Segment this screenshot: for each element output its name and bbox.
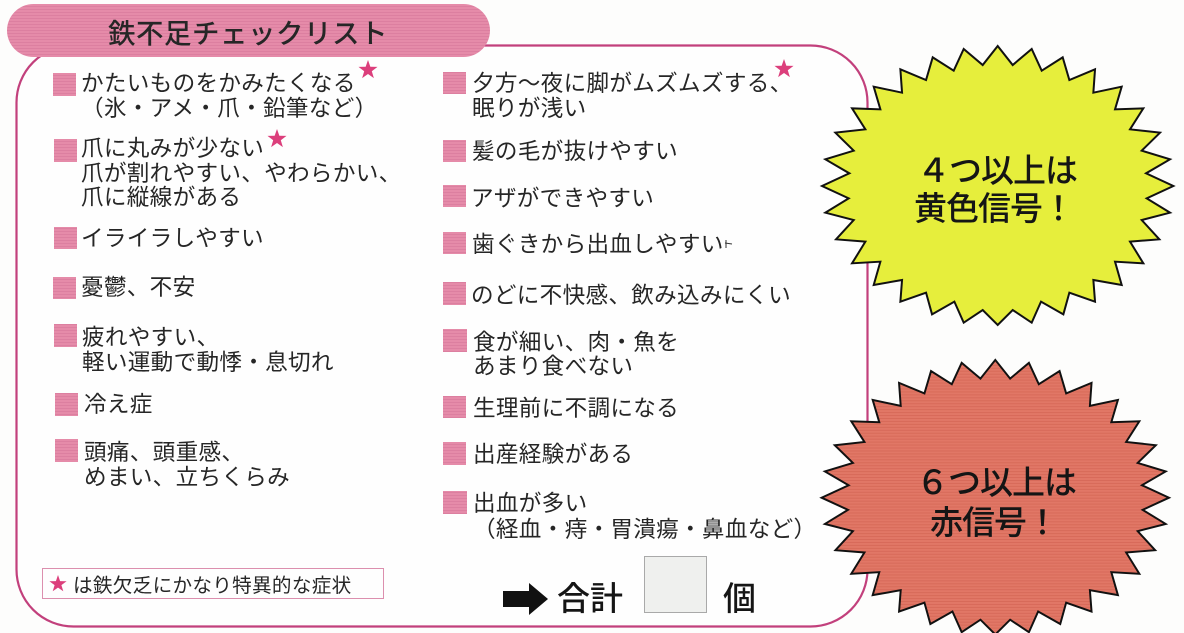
item: bleeding: （経血・痔・胃潰瘍・鼻血など） [473, 517, 816, 542]
item: hard things craving [53, 71, 378, 121]
item: depression: 憂鬱、不安 [81, 275, 195, 300]
burst: yellow signal [822, 46, 1173, 325]
item: nails: 爪に丸みが少ない [81, 136, 264, 161]
item: headache [55, 439, 290, 490]
burst: red signal [822, 360, 1169, 633]
title banner [7, 4, 490, 57]
item: bleeding: 出血が多い [473, 491, 587, 516]
item: hard things craving: （氷・アメ・爪・鉛筆など） [81, 96, 378, 121]
burst: red signal: 赤信号！ [930, 504, 1058, 541]
item: bleeding [443, 491, 816, 542]
icon: star 3 [774, 59, 794, 77]
item: childbirth: 出産経験がある [473, 442, 633, 467]
burst: red signal: ６つ以上は [916, 464, 1076, 501]
item: nails [54, 136, 402, 210]
total row: 個 [723, 580, 756, 617]
item: headache: めまい、立ちくらみ [84, 465, 290, 490]
item: cold: 冷え症 [84, 392, 153, 417]
total row [503, 556, 756, 617]
legend: star note: は鉄欠乏にかなり特異的な症状 [73, 575, 352, 597]
item: bruises: アザができやすい [471, 186, 654, 211]
burst: yellow signal: 黄色信号！ [914, 190, 1074, 227]
item: small appetite: 食が細い、肉・魚を [473, 330, 679, 355]
item: premenstrual: 生理前に不調になる [473, 396, 679, 421]
item: irritability: イライラしやすい [81, 226, 264, 251]
item: throat: のどに不快感、飲み込みにくい [471, 283, 791, 308]
item: fatigue: 疲れやすい、 [82, 325, 219, 350]
item: fatigue [54, 324, 334, 375]
legend: star note [42, 568, 384, 598]
title banner: 鉄不足チェックリスト [108, 18, 388, 49]
item: headache: 頭痛、頭重感、 [84, 440, 244, 465]
total row: 合計 [557, 580, 623, 617]
item: small appetite: あまり食べない [473, 354, 633, 379]
icon: arrow [503, 583, 548, 615]
item: hair loss: 髪の毛が抜けやすい [472, 139, 678, 164]
icon: star 2 [267, 129, 287, 147]
item: gum bleeding: 歯ぐきから出血しやすい [472, 232, 724, 257]
item: small appetite [443, 329, 679, 379]
item: nails: 爪が割れやすい、やわらかい、 [81, 161, 402, 186]
item: fatigue: 軽い運動で動悸・息切れ [82, 350, 334, 375]
item: hard things craving: かたいものをかみたくなる [81, 71, 356, 96]
panel: checklist frame [16, 46, 868, 626]
item: restless legs: 眠りが浅い [472, 96, 586, 121]
item: restless legs: 夕方～夜に脚がムズムズする、 [472, 71, 793, 96]
burst: yellow signal: ４つ以上は [917, 152, 1077, 189]
item: restless legs [443, 71, 793, 121]
item: nails: 爪に縦線がある [81, 185, 241, 210]
icon: star 1 [358, 60, 378, 78]
